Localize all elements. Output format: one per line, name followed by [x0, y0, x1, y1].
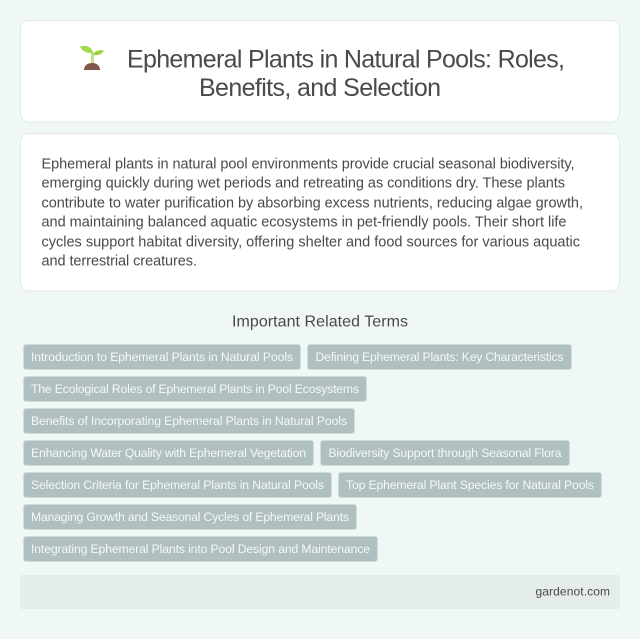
tag: benefits	[24, 408, 354, 434]
tag: selection criteria	[24, 472, 332, 498]
text block: description: emerging quickly during wet periods and retreating as conditions dry. These plants	[42, 176, 565, 192]
footer: gardenot.com	[536, 584, 610, 598]
text block: description	[42, 156, 583, 270]
tag: introduction: Introduction to Ephemeral Plants in Natural Pools	[31, 350, 293, 364]
tag: selection criteria: Selection Criteria for Ephemeral Plants in Natural Pools	[31, 478, 324, 492]
tag: integrating	[24, 536, 378, 562]
tag: water quality	[24, 440, 314, 466]
title	[127, 46, 565, 102]
text block: description: and maintaining balanced aquatic ecosystems in pet-friendly pools. Their short life	[42, 214, 566, 230]
tag: biodiversity	[320, 440, 570, 466]
text block: description: contribute to water purification by absorbing excess nutrients, reducing algae growth,	[42, 196, 583, 212]
footer	[20, 575, 620, 609]
text block: description: Ephemeral plants in natural pool environments provide crucial seasonal biodiversity,	[42, 156, 574, 172]
tag: ecological roles	[24, 376, 366, 402]
heading: related terms: Important Related Terms	[232, 314, 408, 330]
panel: title card	[20, 20, 620, 122]
tag: top species	[338, 472, 602, 498]
tag: biodiversity: Biodiversity Support through Seasonal Flora	[328, 446, 562, 460]
text block: description: and terrestrial creatures.	[42, 254, 197, 270]
tag: defining: Defining Ephemeral Plants: Key Characteristics	[316, 350, 564, 364]
icon: sprout	[80, 46, 104, 70]
tag: managing growth: Managing Growth and Seasonal Cycles of Ephemeral Plants	[31, 510, 349, 524]
title: Benefits, and Selection	[199, 74, 441, 102]
tag: managing growth	[24, 504, 356, 530]
title: Ephemeral Plants in Natural Pools: Roles,	[127, 46, 565, 74]
tag: benefits: Benefits of Incorporating Ephemeral Plants in Natural Pools	[31, 414, 347, 428]
tag: defining	[308, 344, 572, 370]
tag: ecological roles: The Ecological Roles of Ephemeral Plants in Pool Ecosystems	[31, 382, 359, 396]
tag: top species: Top Ephemeral Plant Species for Natural Pools	[346, 478, 594, 492]
text block: description: cycles support habitat diversity, offering shelter and food sources for various aquatic	[42, 234, 580, 250]
tag: introduction	[24, 344, 300, 370]
tag: integrating: Integrating Ephemeral Plants into Pool Design and Maintenance	[31, 542, 370, 556]
panel: description card	[20, 134, 620, 291]
tag: water quality: Enhancing Water Quality with Ephemeral Vegetation	[31, 446, 306, 460]
panel: related term tags	[24, 344, 602, 562]
